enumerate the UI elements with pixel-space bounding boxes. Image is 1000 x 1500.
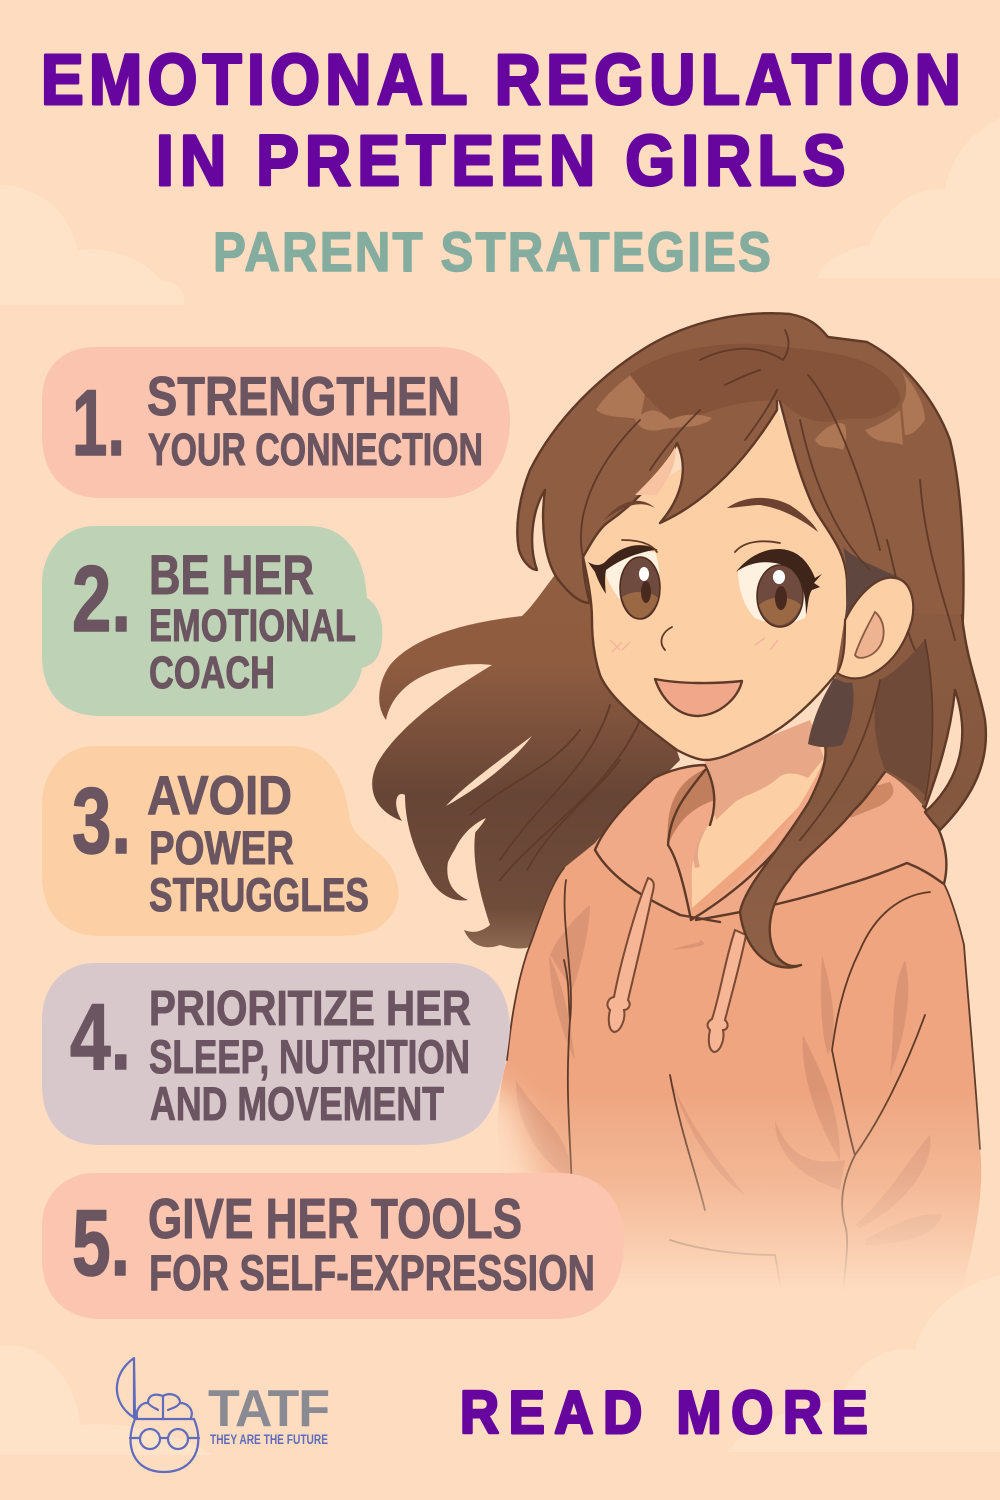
- hoodie shadows: [516, 905, 930, 1212]
- dark hair shadow by ear: [808, 547, 900, 747]
- back hair strands: [470, 705, 640, 880]
- nose: [661, 627, 672, 650]
- strategy 2 bubble: BE HER: [149, 543, 314, 606]
- hair highlights: [596, 370, 925, 450]
- logo: brain with glasses icon: [117, 1358, 199, 1472]
- strategy 2 bubble: 2.: [72, 546, 131, 651]
- right eye: [735, 541, 822, 627]
- hair strand lines: [581, 330, 955, 840]
- subtitle: PARENT STRATEGIES: [213, 221, 771, 284]
- strategy 1 bubble: YOUR CONNECTION: [148, 424, 483, 475]
- strategy 1 bubble: STRENGTHEN: [147, 365, 460, 427]
- strategy 5 bubble: 5.: [72, 1190, 130, 1295]
- title: EMOTIONAL REGULATION: [41, 41, 961, 120]
- strategy 4 bubble: AND MOVEMENT: [150, 1077, 444, 1130]
- strategy 4 bubble: [42, 963, 510, 1145]
- neck: [690, 720, 828, 908]
- strategy 2 bubble: COACH: [149, 647, 275, 698]
- strategy 1 bubble: [42, 347, 510, 498]
- hoodie fold lines: [507, 868, 980, 1300]
- front hair: [517, 313, 964, 640]
- strategy 4 bubble: 4.: [70, 984, 131, 1089]
- strategy 3 bubble: 3.: [72, 768, 131, 873]
- ear: [837, 578, 913, 678]
- darker crown patch: [625, 344, 900, 422]
- strategy 4 bubble: PRIORITIZE HER: [149, 982, 471, 1036]
- eyebrows: [604, 498, 818, 532]
- title: [41, 41, 961, 201]
- hoodie: [498, 720, 981, 1300]
- strategy 2 bubble: [42, 526, 382, 716]
- right hair mass and front lock: [740, 610, 986, 968]
- face: [583, 410, 850, 760]
- darker inner right hair: [875, 640, 932, 795]
- logo wordmark: THEY ARE THE FUTURE: [210, 1432, 328, 1447]
- back hair: [372, 500, 680, 948]
- mouth: [655, 679, 742, 716]
- read more link: READ MORE: [460, 1379, 868, 1447]
- skin sliver between bangs: [635, 447, 676, 495]
- hoodie drawstrings: [607, 878, 746, 1052]
- strategy 3 bubble: [42, 746, 398, 936]
- strategy 4 bubble: SLEEP, NUTRITION: [149, 1030, 470, 1083]
- strategy 2 bubble: EMOTIONAL: [149, 600, 356, 651]
- strategy 5 bubble: FOR SELF-EXPRESSION: [149, 1245, 595, 1301]
- hood: [659, 766, 713, 898]
- strategy 3 bubble: POWER: [149, 821, 294, 874]
- illustration: girl with long hair and peach hoodie: [42, 313, 986, 1472]
- left eye: [588, 540, 660, 619]
- strategy 3 bubble: STRUGGLES: [149, 868, 369, 921]
- hood outline: [595, 765, 946, 922]
- strategy 1 bubble: 1.: [72, 370, 125, 475]
- face outline: [583, 557, 837, 760]
- hair gaps: [446, 736, 532, 806]
- strategy 5 bubble: [42, 1173, 624, 1319]
- strategy 3 bubble: AVOID: [147, 764, 292, 826]
- title: IN PRETEEN GIRLS: [156, 122, 845, 201]
- logo wordmark: TATF: [208, 1380, 330, 1438]
- blush marks: [610, 638, 778, 652]
- strategy 5 bubble: GIVE HER TOOLS: [148, 1187, 522, 1251]
